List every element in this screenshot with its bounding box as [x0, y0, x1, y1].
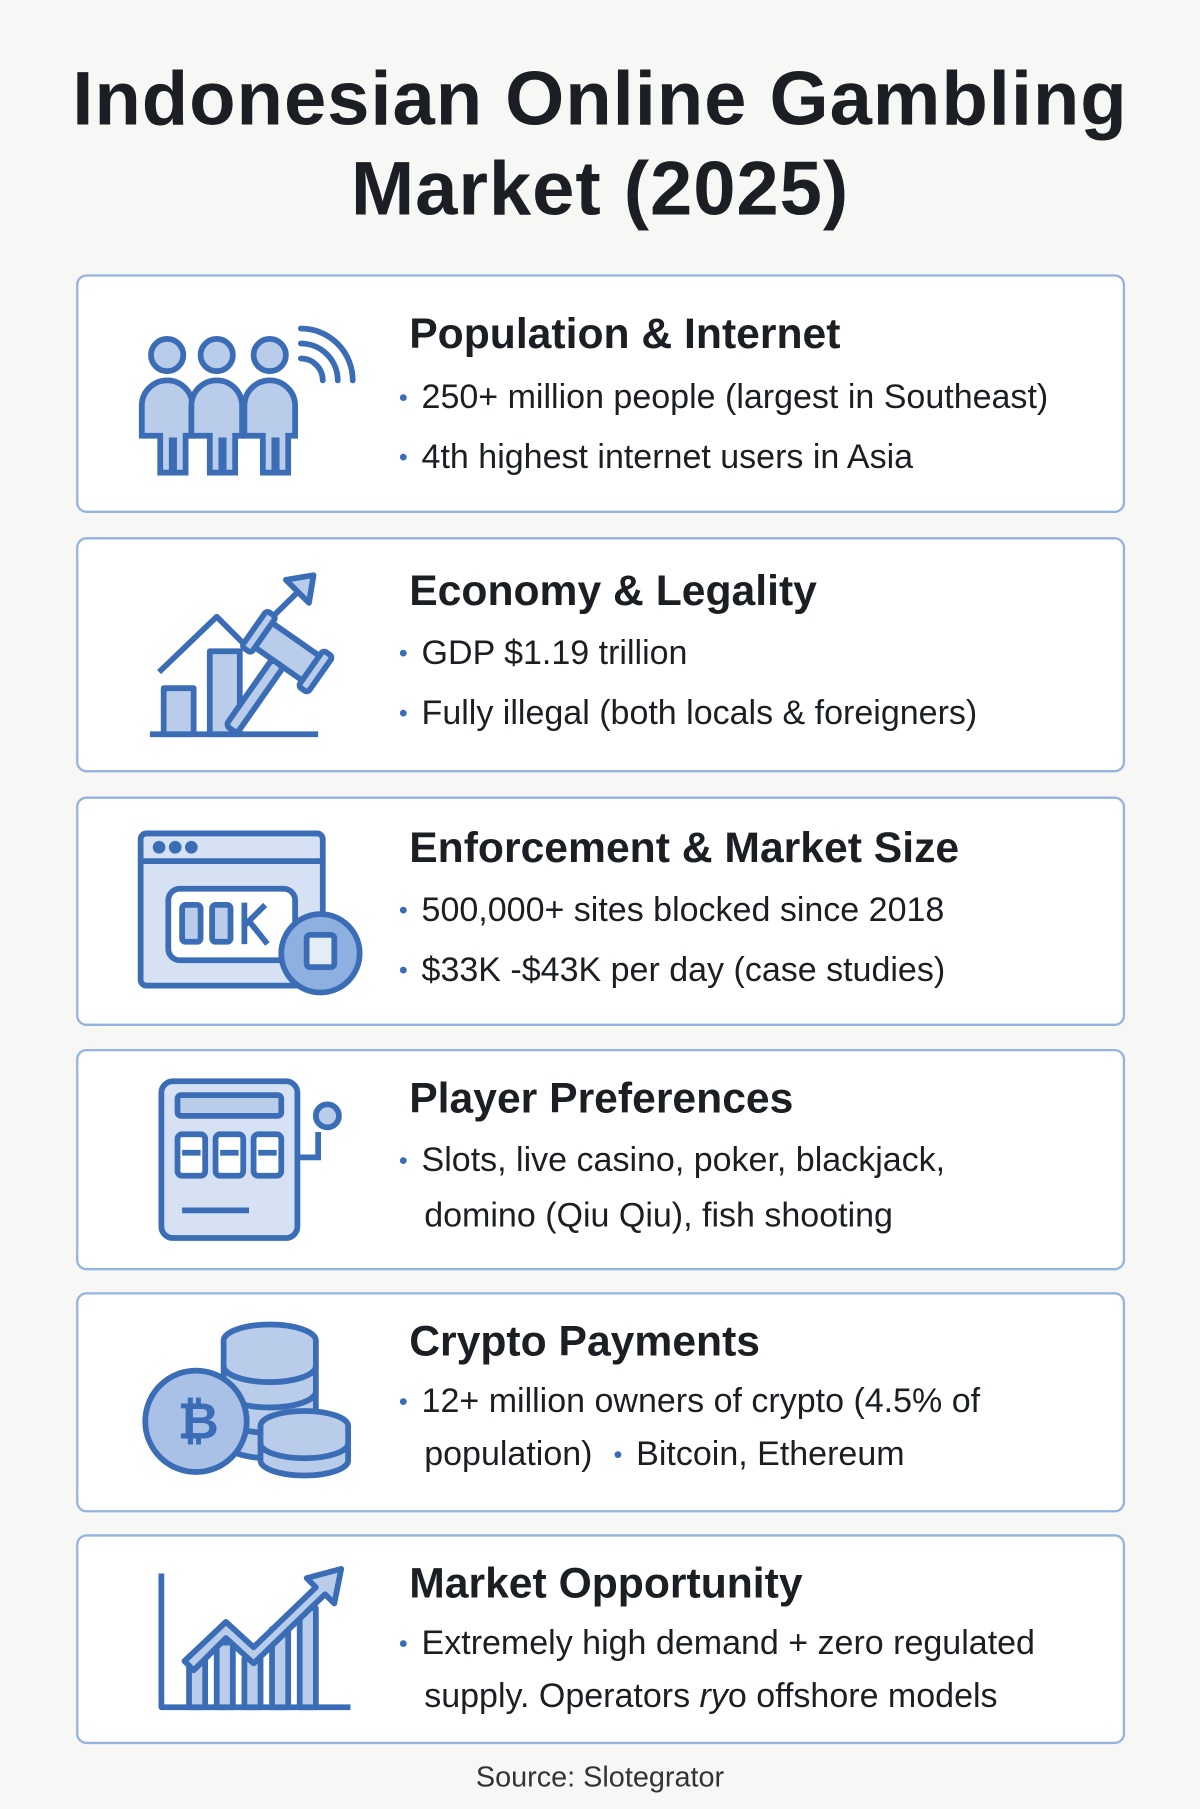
- bullets: • 12+ million owners of crypto (4.5% of: [399, 1382, 980, 1420]
- panel: crypto payments: population) • Bitcoin, Ethereum: [424, 1435, 905, 1473]
- heading: Population & Internet: [409, 310, 840, 357]
- panel: market opportunity: [76, 1534, 1125, 1744]
- heading: Player Preferences: [409, 1074, 793, 1122]
- icon: bitcoin symbol: ₿: [178, 1394, 219, 1450]
- panel: population & internet: [76, 274, 1125, 513]
- panel: player preferences: domino (Qiu Qiu), fish shooting: [424, 1197, 893, 1235]
- panel: enforcement & market size: • $33K -$43K per day (case studies): [399, 951, 945, 989]
- icon: slot machine: [158, 1078, 342, 1241]
- icon: coins: [142, 1322, 351, 1478]
- heading: Enforcement & Market Size: [409, 824, 959, 871]
- bullets: • GDP $1.19 trillion: [399, 634, 687, 672]
- panel: enforcement & market size: [76, 797, 1125, 1026]
- icon: chart and gavel: [150, 572, 334, 738]
- panel: market opportunity: supply. Operators ryo offshore models: [424, 1677, 998, 1715]
- bullets: • 500,000+ sites blocked since 2018: [399, 891, 944, 929]
- source: Source: Slotegrator: [476, 1761, 724, 1794]
- panel: crypto payments: [76, 1292, 1125, 1512]
- icon: growth chart: [158, 1566, 350, 1710]
- icon: people with signal: [138, 326, 356, 476]
- title: [72, 55, 1128, 231]
- bullets: • Extremely high demand + zero regulated: [399, 1624, 1035, 1662]
- panel: player preferences: [76, 1049, 1125, 1270]
- heading: Market Opportunity: [409, 1560, 803, 1607]
- bullets: • 250+ million people (largest in Southeast): [399, 378, 1048, 416]
- panel: population & internet: • 4th highest internet users in Asia: [399, 438, 913, 476]
- title: Indonesian Online Gambling: [72, 55, 1128, 141]
- panel: economy & legality: [76, 537, 1125, 772]
- title: Market (2025): [351, 145, 849, 231]
- heading: Crypto Payments: [409, 1318, 760, 1365]
- icon: blocked browser: [138, 830, 363, 996]
- panel: economy & legality: • Fully illegal (both locals & foreigners): [399, 694, 977, 732]
- heading: Economy & Legality: [409, 567, 817, 614]
- bullets: • Slots, live casino, poker, blackjack,: [399, 1141, 945, 1179]
